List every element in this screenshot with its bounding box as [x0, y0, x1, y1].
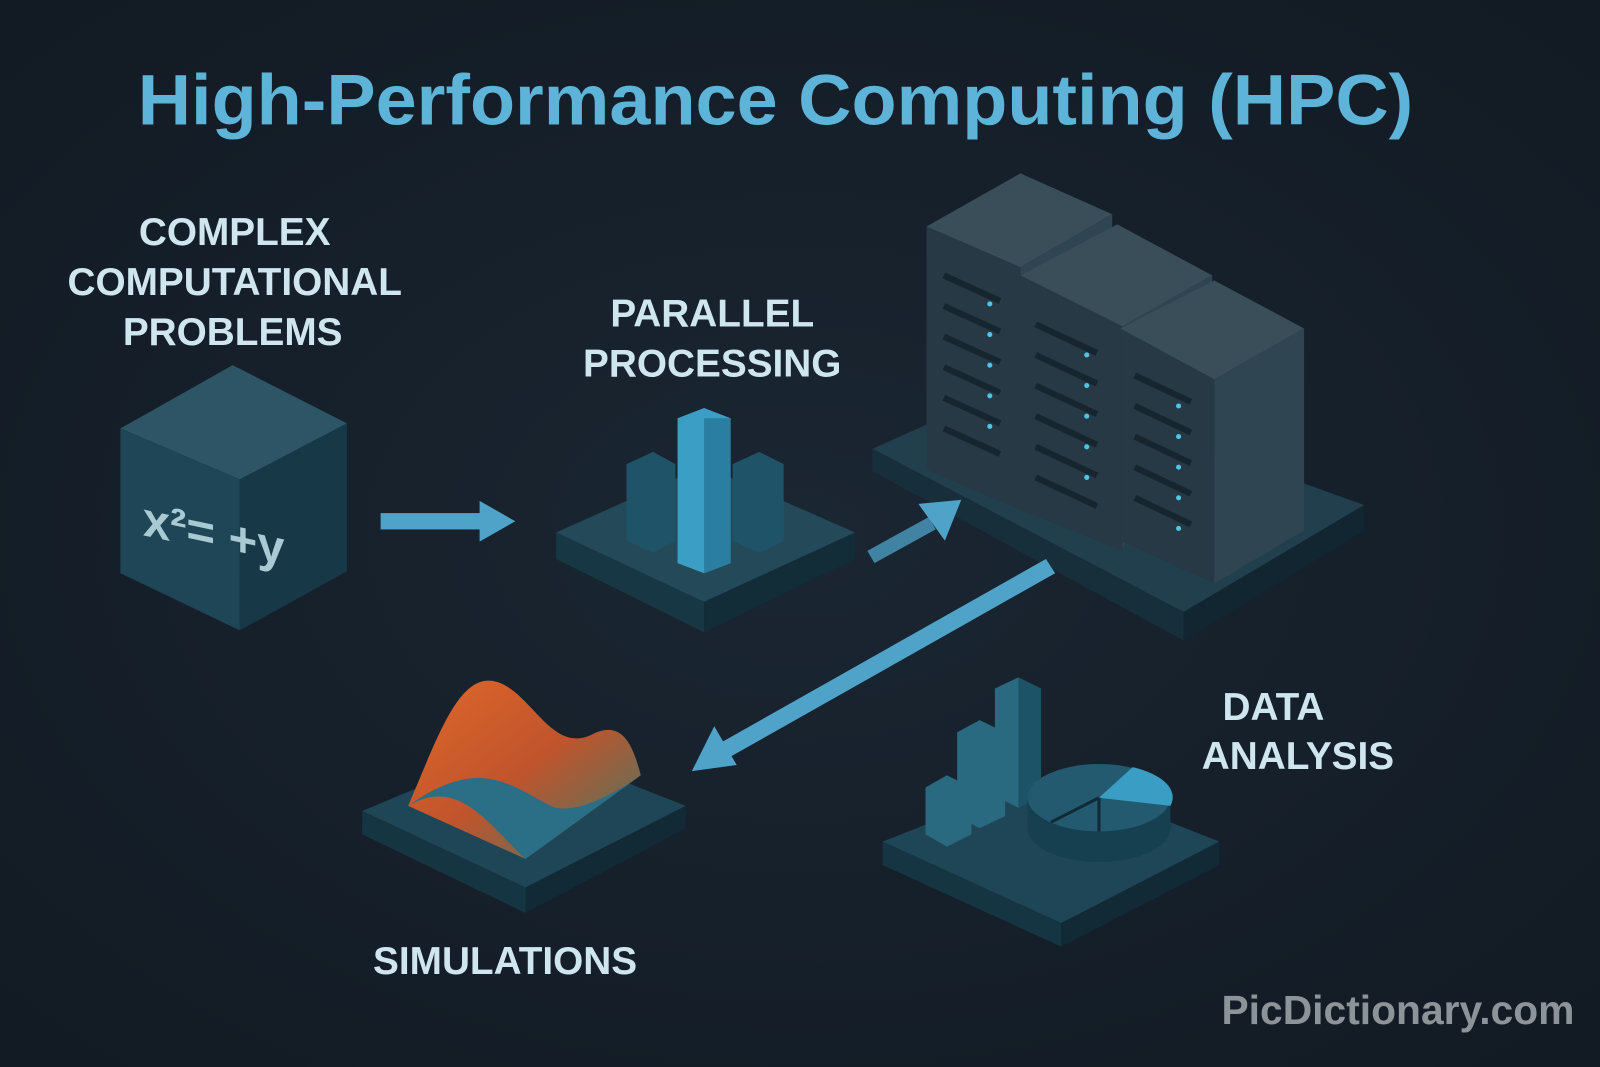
label: parallel processing [583, 292, 841, 385]
icon: data analysis platform [883, 677, 1219, 947]
label: simulations: SIMULATIONS [373, 940, 637, 983]
arrow: servers to simulations [692, 559, 1055, 771]
icon: simulation platform [362, 681, 686, 913]
label: data analysis [1202, 686, 1394, 778]
arrow: parallel to servers [867, 500, 961, 563]
watermark: PicDictionary.com [1221, 987, 1574, 1033]
label: data analysis: DATA [1223, 686, 1324, 729]
label: complex computational problems: PROBLEMS [123, 311, 342, 354]
label: data analysis: ANALYSIS [1202, 735, 1394, 778]
label: complex computational problems: COMPUTATIONAL [67, 261, 402, 304]
icon: server rack [872, 173, 1364, 641]
arrow: problems to parallel [381, 501, 515, 542]
label: complex computational problems: COMPLEX [139, 211, 331, 254]
icon: equation cube: x²= +y [143, 492, 285, 576]
label: complex computational problems [67, 211, 402, 354]
title: High-Performance Computing (HPC) [138, 60, 1413, 140]
label: parallel processing: PARALLEL [610, 292, 814, 335]
icon: parallel processing platform [556, 408, 855, 632]
label: parallel processing: PROCESSING [583, 342, 841, 385]
icon: equation cube [120, 365, 347, 630]
